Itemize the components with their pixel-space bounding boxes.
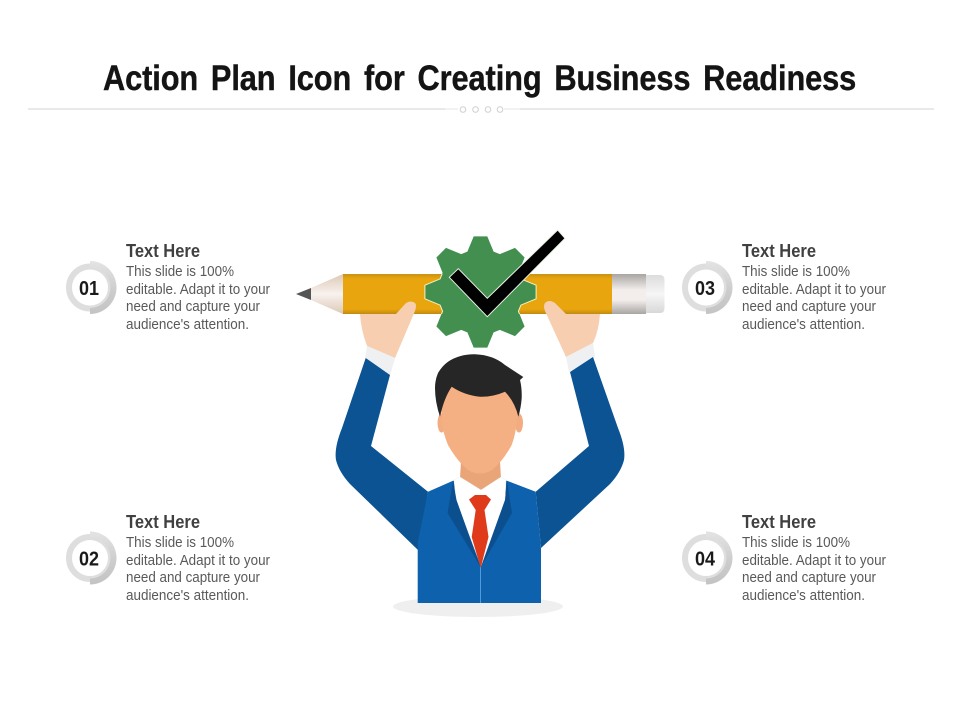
number badge 03 [685,261,732,314]
number badge 04 [685,532,732,584]
text block 03: editable. Adapt it to your [742,282,886,298]
text block 03: This slide is 100% [742,264,850,280]
text block 04: audience's attention. [742,588,865,604]
text block 02: need and capture your [126,570,260,586]
text block 02: This slide is 100% [126,535,234,551]
left cuff [365,346,395,376]
item 01 [69,241,270,333]
item 04 [685,512,886,604]
number badge 01: 01 [79,277,99,300]
item 03 [685,241,886,333]
title: Action Plan Icon for Creating Business Readiness [103,58,856,97]
ears [438,414,523,432]
text block 01: editable. Adapt it to your [126,282,270,298]
text block 04: This slide is 100% [742,535,850,551]
text block 03 [742,241,886,333]
text block 01: need and capture your [126,299,260,315]
text block 01: This slide is 100% [126,264,234,280]
torso [418,481,541,603]
pencil [296,274,664,314]
text block 02: editable. Adapt it to your [126,553,270,569]
text block 04: need and capture your [742,570,876,586]
number badge 04: 04 [695,548,716,570]
number badge 02 [69,532,116,584]
left arm [336,358,428,550]
icon: businessman holding pencil [296,230,664,617]
text block 01 [126,241,270,333]
text block 02: audience's attention. [126,588,249,604]
neck [460,462,501,492]
shirt collar [454,477,506,566]
text block 03: Text Here [742,241,816,261]
jacket centre seam [480,566,482,603]
face [441,385,518,474]
right cuff [566,343,595,372]
text block 04 [742,512,886,604]
gear with check mark [425,230,565,348]
text block 01: audience's attention. [126,317,249,333]
number badge 01 [69,261,116,314]
text block 04: editable. Adapt it to your [742,553,886,569]
title divider [28,107,934,112]
text block 02: Text Here [126,512,200,532]
text block 04: Text Here [742,512,816,532]
number badge 03: 03 [695,277,715,300]
text block 03: audience's attention. [742,317,865,333]
ground shadow [393,596,563,617]
number badge 02: 02 [79,548,99,570]
hair [435,354,523,417]
tie [469,495,491,568]
right arm [536,357,624,548]
item 02 [69,512,270,604]
right hand [544,301,600,357]
jacket lapels [448,481,512,566]
text block 02 [126,512,270,604]
text block 01: Text Here [126,241,200,261]
left hand [360,302,416,358]
text block 03: need and capture your [742,299,876,315]
